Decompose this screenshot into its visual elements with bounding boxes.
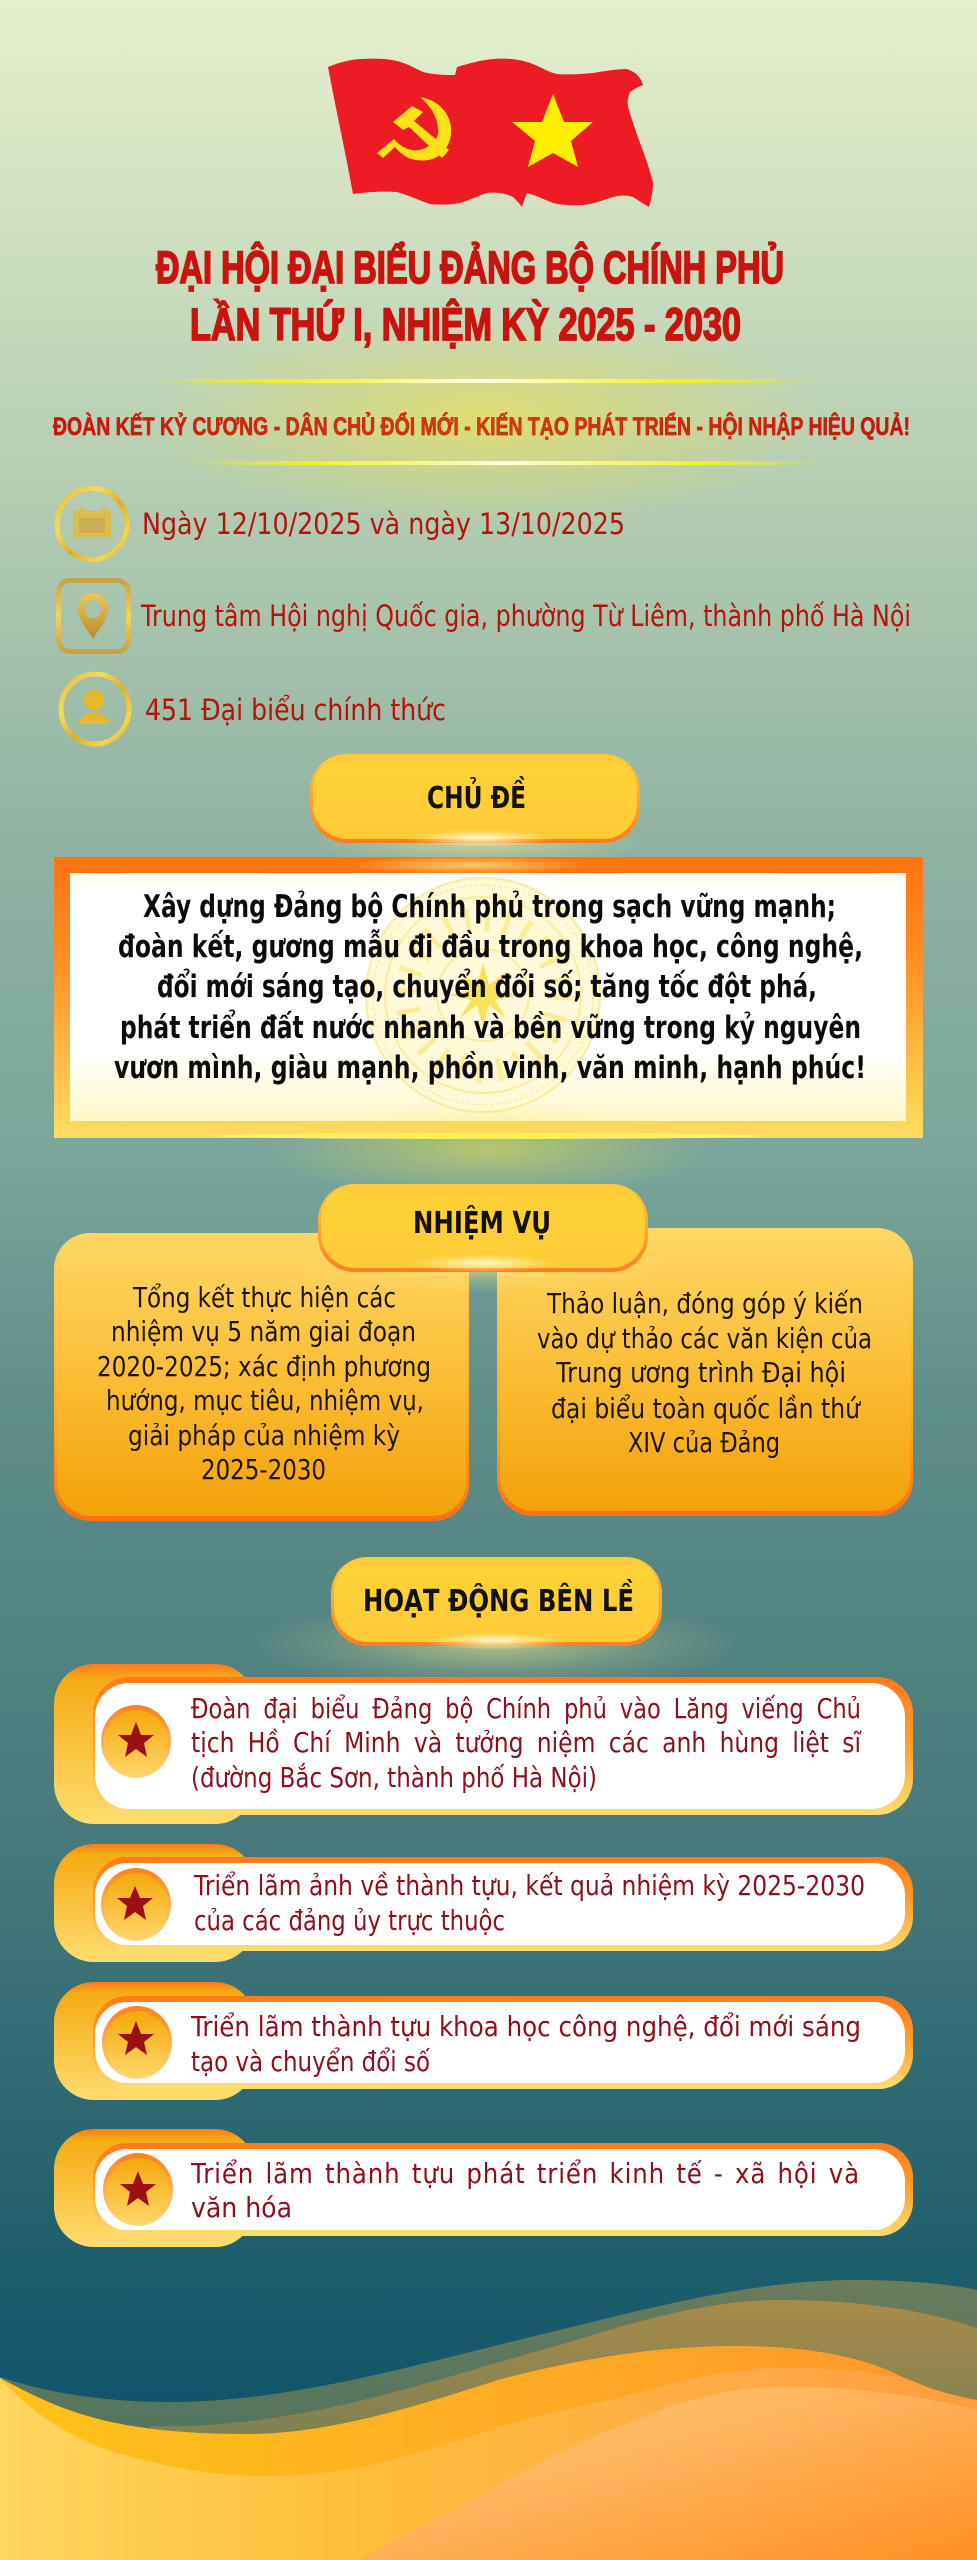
panel: task one: hướng, mục tiêu, nhiệm vụ, [106,1384,424,1417]
title: LẦN THỨ I, NHIỆM KỲ 2025 - 2030 [190,299,741,350]
panel: task two: vào dự thảo các văn kiện của [537,1322,872,1355]
upper glowing divider [150,379,816,383]
icon: calendar in gold ring [57,488,127,560]
panel: activity three: Triển lãm thành tựu khoa học công nghệ, đổi mới sáng [190,2010,861,2043]
panel: task one: 2020-2025; xác định phương [97,1350,431,1383]
panel: activity two: của các đảng ủy trực thuộc [194,1904,505,1937]
heading: Nhiệm vụ: NHIỆM VỤ [413,1204,551,1241]
icon: hammer [393,106,449,158]
date text: Ngày 12/10/2025 và ngày 13/10/2025 [142,507,625,541]
panel: activity four: Triển lãm thành tựu phát triển kinh tế - xã hội và [190,2157,860,2190]
panel: task one: 2025-2030 [201,1453,326,1486]
panel: theme [54,856,923,1139]
panel: activity three: tạo và chuyển đổi số [191,2045,430,2078]
panel: task one: nhiệm vụ 5 năm giai đoạn [111,1315,416,1348]
panel: activity three [54,1982,913,2100]
icon: star [512,94,593,167]
panel: activity one [54,1664,913,1824]
panel: activity two [54,1844,913,1962]
heading: Hoạt động bên lề: HOẠT ĐỘNG BÊN LỀ [363,1579,634,1619]
delegates text: 451 Đại biểu chính thức [145,693,446,727]
panel: activity one: (đường Bắc Sơn, thành phố Hà Nội) [191,1761,597,1794]
panel: task one [54,1233,469,1521]
heading: Chủ đề [310,754,650,868]
panel: task two [497,1228,913,1516]
panel: task one: Tổng kết thực hiện các [132,1281,396,1314]
icon: location pin in gold square [58,580,128,652]
icon: state emblem watermark [366,878,600,1112]
lower glowing divider [187,461,829,465]
heading: Nhiệm vụ [293,1184,673,1294]
panel: task two: đại biểu toàn quốc lần thứ [551,1392,861,1425]
glow below theme panel [268,1102,708,1198]
panel: activity four: văn hóa [191,2191,292,2224]
heading: Hoạt động bên lề [246,1557,746,1690]
panel: task two: Thảo luận, đóng góp ý kiến [546,1287,863,1320]
panel: activity two: Triển lãm ảnh về thành tựu, kết quả nhiệm kỳ 2025-2030 [193,1869,865,1902]
soft glow behind slogan [148,312,828,528]
decorative waves at the bottom [0,2280,977,2560]
panel: task one: giải pháp của nhiệm kỳ [128,1419,400,1452]
icon: sickle [377,97,451,160]
title [156,242,784,350]
theme text [114,889,866,1086]
panel: activity one: tịch Hồ Chí Minh và tưởng niệm các anh hùng liệt sĩ [191,1726,862,1759]
icon: party flag [328,59,653,207]
heading: Chủ đề: CHỦ ĐỀ [427,776,526,816]
panel: activity four [54,2129,913,2247]
panel: task two: Trung ương trình Đại hội [555,1356,846,1389]
panel: task two: XIV của Đảng [628,1426,780,1459]
icon: delegate in gold ring [61,674,129,744]
